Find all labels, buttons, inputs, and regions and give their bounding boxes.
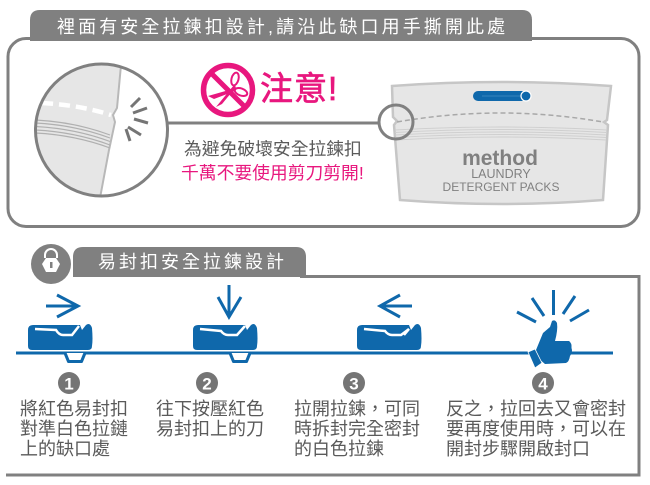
text 3: 的白色拉鍊 (294, 439, 384, 459)
number 3 (343, 372, 365, 394)
text 2: 易封扣上的刀 (156, 419, 264, 439)
text 4 (446, 399, 626, 459)
panel: zipper design steps (6, 244, 639, 475)
icon: no scissors (204, 66, 252, 114)
warning heading: 注意! (260, 70, 338, 107)
step 2: press (156, 285, 264, 439)
detail circle: tear notch (34, 62, 169, 198)
text 4: 要再度使用時，可以在 (446, 419, 626, 439)
number 1: 1 (64, 374, 74, 394)
number 1 (58, 372, 80, 394)
warning text: 為避免破壞安全拉鍊扣 (184, 139, 362, 159)
step 3: pull open (294, 295, 422, 459)
text 1: 將紅色易封扣 (20, 399, 128, 419)
warning text: 千萬不要使用剪刀剪開! (181, 163, 364, 183)
arrow left (380, 295, 412, 317)
text 1: 對準白色拉鏈 (20, 419, 128, 439)
warning text (181, 139, 364, 183)
icon: tear burst ticks (126, 98, 148, 141)
brand text (443, 147, 559, 194)
step 1: align (20, 295, 128, 459)
arrow right (46, 295, 78, 317)
icon: lock (31, 244, 71, 284)
text 2 (156, 399, 264, 439)
brand text: method (462, 147, 538, 170)
number 4 (532, 372, 554, 394)
step 4: reseal (446, 290, 626, 459)
zipper slider (473, 91, 531, 101)
small detail circle (379, 105, 413, 139)
panel: tear warning (8, 10, 639, 226)
number 2 (196, 372, 218, 394)
zipper notch (227, 353, 253, 362)
brand text: LAUNDRY (471, 167, 531, 181)
heading tab: zipper design: 易封扣安全拉鍊設計 (98, 252, 287, 272)
text 1: 上的缺口處 (20, 439, 110, 459)
illustration: detergent bag (379, 82, 611, 204)
number 4: 4 (538, 374, 548, 394)
text 4: 開封步驟開啟封口 (446, 439, 590, 459)
heading tab: tear here: 裡面有安全拉鍊扣設計,請沿此缺口用手撕開此處 (57, 17, 508, 37)
text 3 (294, 399, 420, 459)
brand text: DETERGENT PACKS (443, 180, 559, 194)
text 3: 拉開拉鍊，可同 (294, 399, 420, 419)
icon: thumbs up (517, 290, 589, 368)
arrow down (218, 285, 241, 317)
heading tab: tear here (30, 10, 532, 41)
text 2: 往下按壓紅色 (156, 399, 264, 419)
number 2: 2 (202, 374, 212, 394)
number 3: 3 (349, 374, 359, 394)
text 3: 時拆封完全密封 (294, 419, 420, 439)
slider icon 3 (357, 324, 422, 350)
zipper notch (62, 353, 88, 362)
slider icon 2 (193, 324, 258, 350)
heading tab: zipper design (73, 247, 306, 277)
slider icon 1 (28, 324, 92, 350)
timeline line (16, 352, 613, 354)
text 1 (20, 399, 128, 459)
connector line (167, 122, 380, 124)
text 4: 反之，拉回去又會密封 (446, 399, 626, 419)
